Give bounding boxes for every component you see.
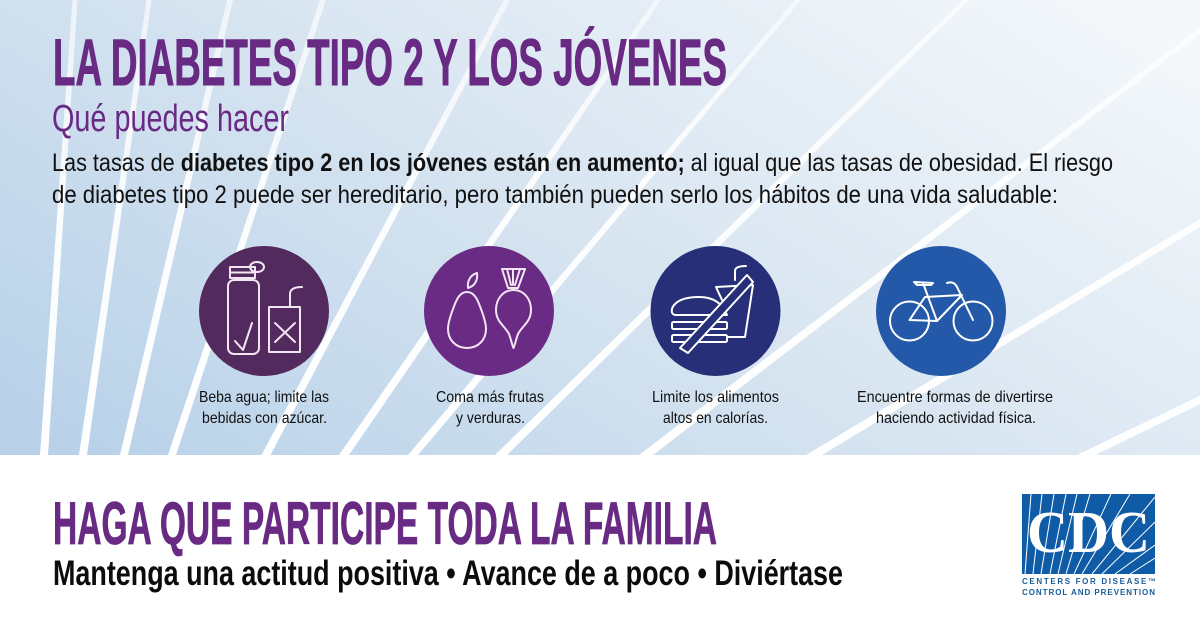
panel: white footer band [0,455,1200,630]
icon: bicycle [890,282,992,340]
caption: fruit: y verduras. [456,410,525,427]
panel: calories tip [650,246,780,427]
caption: activity [857,389,1053,427]
intro paragraph: de diabetes tipo 2 puede ser hereditario, pero también pueden serlo los hábitos de una vida saludable: [52,181,1058,209]
panel: activity tip [857,246,1053,427]
caption: activity: haciendo actividad física. [876,410,1036,427]
caption: fruit: Coma más frutas [436,389,544,406]
caption: fruit [436,389,544,427]
intro paragraph: Las tasas de diabetes tipo 2 en los jóvenes están en aumento; al igual que las tasas de obesidad. El riesgo [52,149,1113,177]
caption: calories: altos en calorías. [663,410,768,427]
logo: CDC: CONTROL AND PREVENTION [1022,588,1155,597]
caption: activity: Encuentre formas de divertirse [857,389,1053,406]
subtitle: Qué puedes hacer [52,98,289,140]
intro paragraph [52,149,1113,209]
logo: CDC: CENTERS FOR DISEASE™ [1022,577,1156,586]
panel: water tip [199,246,329,427]
logo: CDC [1022,494,1156,597]
tagline: Mantenga una actitud positiva • Avance de a poco • Diviértase [53,554,843,593]
icon: avocado and beet [448,269,531,348]
caption: calories [652,389,779,427]
panel: fruit tip [424,246,554,427]
logo: CDC: CDC [1027,499,1150,565]
caption: water [199,389,329,427]
icon: water bottle and juice box [228,262,302,354]
icon: crossed out fast food [672,266,753,353]
panel: sky background with rays [0,0,1200,455]
caption: water: bebidas con azúcar. [202,410,327,427]
caption: calories: Limite los alimentos [652,389,779,406]
caption: water: Beba agua; limite las [199,389,329,406]
